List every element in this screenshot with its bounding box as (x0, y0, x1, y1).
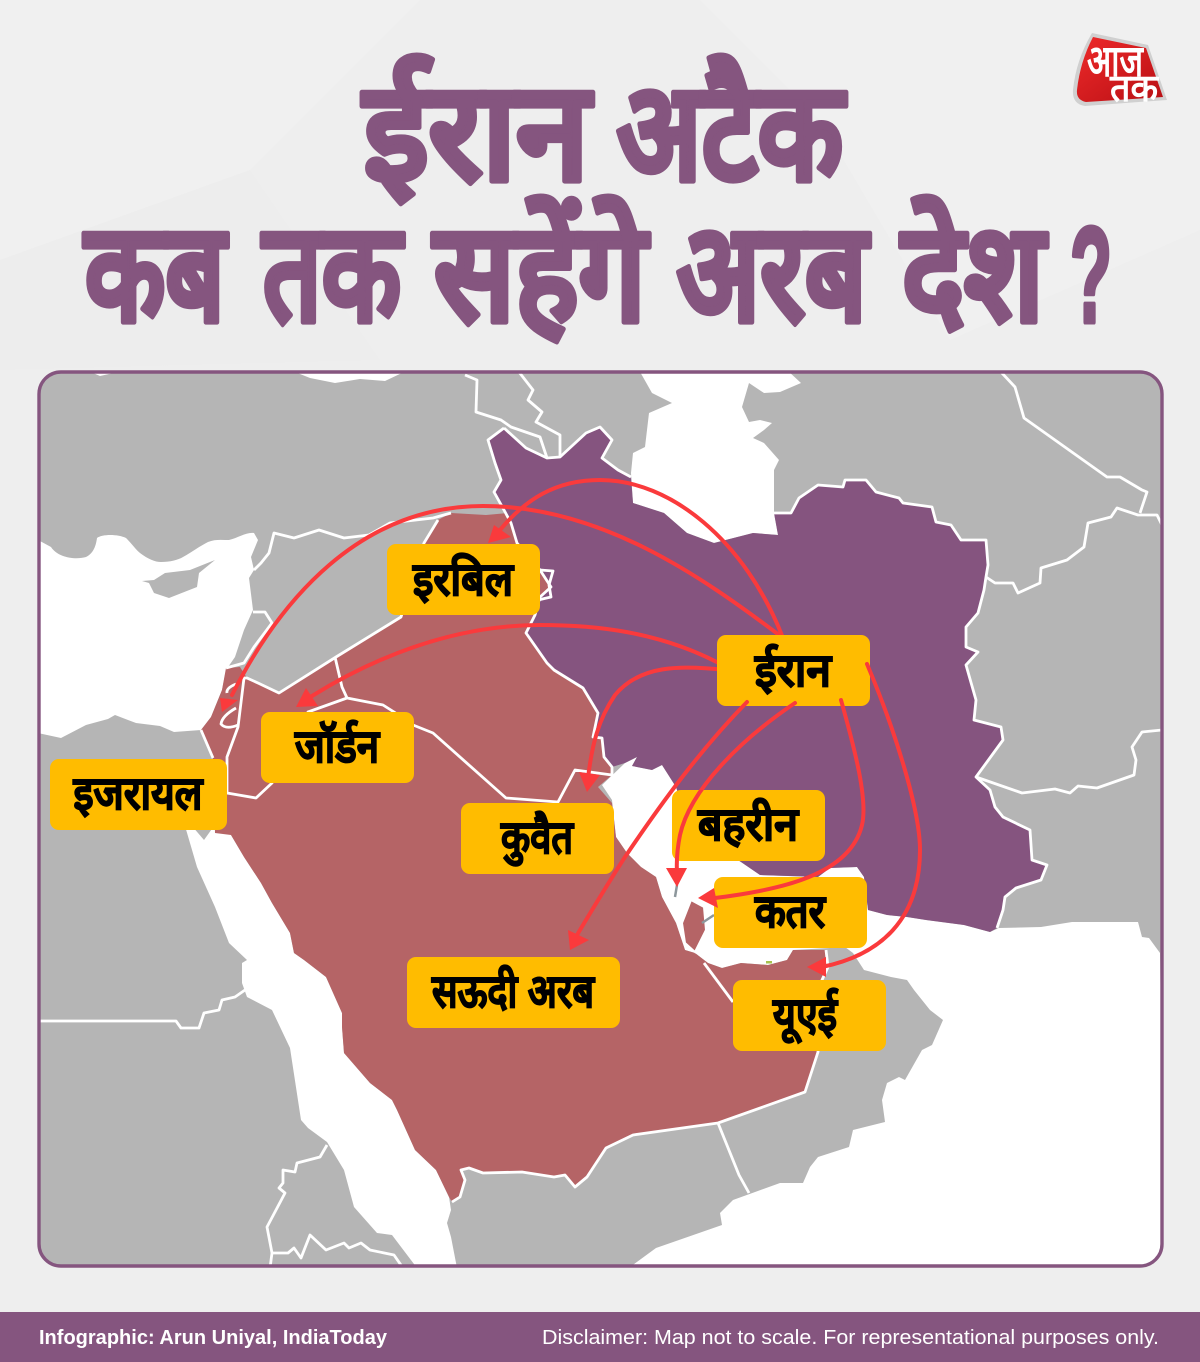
footer credit: Infographic: Arun Uniyal, IndiaToday (39, 1327, 388, 1349)
title line 1 (361, 55, 847, 208)
label: Saudi Arabia: सऊदी अरब (431, 965, 595, 1017)
label: Israel (50, 759, 227, 830)
sea: Persian Gulf and Arabian Sea (602, 757, 1165, 1270)
arrow: Iran to Israel (220, 506, 783, 712)
arrows: strikes from Iran (220, 480, 783, 792)
arrows drawn over labels (568, 664, 920, 977)
title line 1: अटैक (617, 55, 847, 208)
label: Erbil: इरबिल (412, 553, 515, 605)
label: UAE: यूएई (772, 988, 839, 1044)
title line 2: देश (899, 196, 1048, 349)
label: Erbil (387, 544, 540, 615)
country group: Arab states (201, 513, 828, 1202)
label: Jordan: जॉर्डन (294, 720, 380, 772)
national borders (38, 372, 1162, 1268)
title line 2: तक (261, 197, 404, 349)
label: Saudi Arabia (407, 957, 620, 1028)
sea: Mediterranean (38, 533, 258, 738)
label: Qatar: कतर (754, 885, 827, 937)
arrow: Iran to Kuwait (579, 668, 726, 792)
title line 2: अरब (677, 197, 870, 349)
title (83, 55, 1112, 351)
land base (39, 372, 1162, 1266)
title line 1: ईरान (361, 55, 593, 208)
arrow: Iran to Bahrain (666, 703, 795, 887)
footer disclaimer: Disclaimer: Map not to scale. For representational purposes only. (542, 1327, 1159, 1349)
Bahrain and Qatar minor marks (675, 885, 714, 923)
map frame (39, 372, 1162, 1266)
arrow: Iran to Qatar (698, 700, 864, 908)
Qatar peninsula (682, 900, 706, 952)
sea: Red Sea (185, 826, 457, 1268)
title line 2: सहेंगे (431, 196, 650, 349)
footer bar (0, 1312, 1200, 1362)
land: Sinai tip (196, 830, 211, 840)
sea: Caspian (631, 370, 801, 543)
label: Iran (717, 635, 870, 706)
logo: Aaj Tak: तक (1109, 68, 1160, 110)
label: Bahrain: बहरीन (697, 798, 799, 850)
label: Israel: इजरायल (73, 767, 204, 819)
label: Kuwait (461, 803, 614, 874)
arrow: Iran to Saudi Arabia (568, 702, 747, 950)
label: UAE (733, 980, 886, 1051)
logo: Aaj Tak: आज (1087, 37, 1144, 86)
label: Iran: ईरान (754, 644, 832, 696)
arrow: Iran to UAE (807, 664, 920, 977)
island: Cyprus (142, 560, 215, 598)
UAE island (766, 961, 772, 964)
title line 2: ? (1070, 199, 1112, 351)
label: Kuwait: कुवैत (500, 811, 574, 867)
label: Jordan (261, 712, 414, 783)
label: Qatar (714, 877, 867, 948)
logo: Aaj Tak (1073, 33, 1167, 110)
label: Bahrain (672, 790, 825, 861)
sea: north strip (94, 374, 400, 383)
country: Iran (488, 427, 1047, 932)
title line 2: कब (83, 197, 228, 349)
panel: map (38, 370, 1165, 1270)
arrow: Iran to Erbil (488, 480, 783, 638)
title line 2 (83, 196, 1112, 351)
arrow: Iran to Jordan (296, 625, 726, 707)
